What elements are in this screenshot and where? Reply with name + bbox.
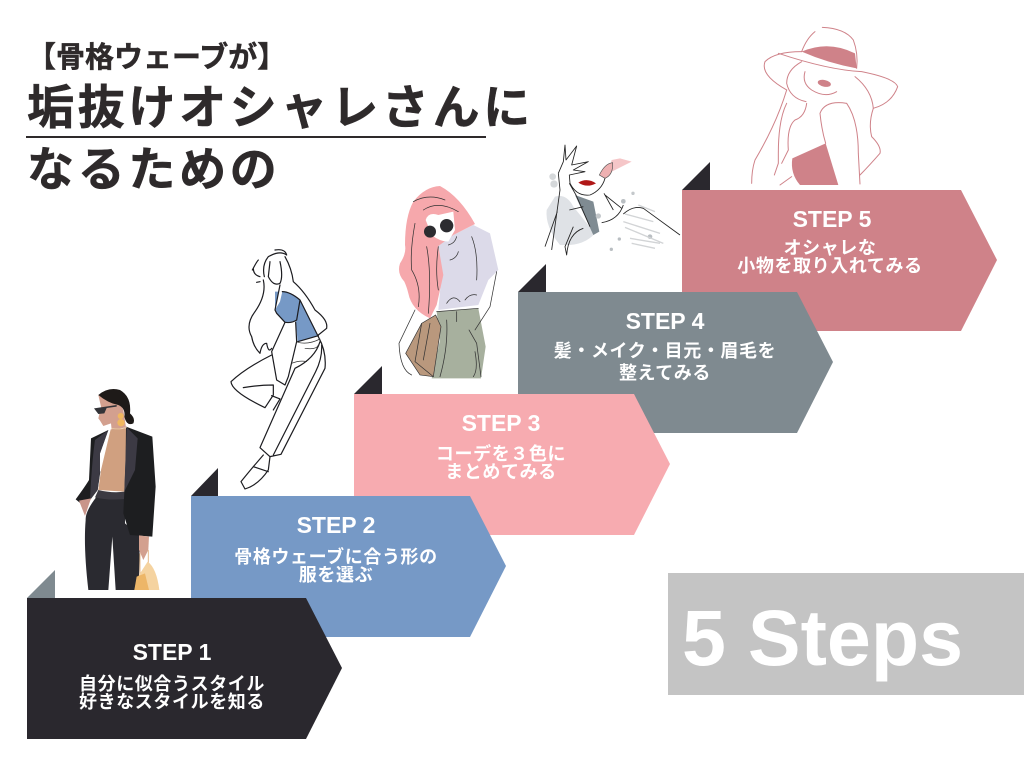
step 4 description: 整えてみる	[619, 363, 711, 383]
step 1 heading: STEP 1	[133, 639, 212, 665]
step 3 corner triangle	[354, 366, 382, 394]
step 5 description: オシャレな	[784, 238, 876, 258]
illustration: woman in black blazer	[76, 389, 159, 590]
step 3 arrow	[354, 394, 670, 535]
step 1 arrow	[27, 598, 342, 739]
step 4 panel	[518, 264, 833, 433]
step 4 heading: STEP 4	[626, 308, 705, 334]
step 2 description: 骨格ウェーブに合う形の	[234, 547, 438, 567]
step 3 description: コーデを３色に	[436, 444, 566, 464]
illustration: line-art woman in pink hat	[752, 27, 898, 185]
step 1 description: 自分に似合うスタイル	[79, 674, 265, 694]
title line 3: なるための	[27, 143, 280, 196]
step 2 arrow	[191, 496, 506, 637]
step 4 corner triangle	[518, 264, 546, 292]
step 1 description: 好きなスタイルを知る	[79, 692, 265, 712]
step 1 panel	[27, 570, 342, 739]
title block	[26, 40, 534, 196]
step 2 description: 服を選ぶ	[299, 565, 373, 585]
step 2 panel	[191, 468, 506, 637]
title line 2: 垢抜けオシャレさんに	[27, 81, 534, 134]
step 4 description: 髪・メイク・目元・眉毛を	[554, 341, 776, 361]
step 4 arrow	[518, 292, 833, 433]
illustration: line-art face with watercolor	[545, 145, 680, 255]
step 1 corner triangle	[27, 570, 55, 598]
step 3 description: まとめてみる	[445, 462, 557, 482]
step 3 heading: STEP 3	[462, 410, 540, 436]
title line 1: 【骨格ウェーブが】	[27, 40, 286, 74]
label text: 5 Steps	[682, 593, 963, 682]
illustration: pink-haired woman with sunglasses	[399, 186, 498, 378]
title underline	[26, 136, 486, 138]
step 5 heading: STEP 5	[793, 206, 872, 232]
step 2 heading: STEP 2	[297, 512, 375, 538]
label background	[668, 573, 1024, 695]
step 5 panel	[682, 162, 997, 331]
step 5 description: 小物を取り入れてみる	[737, 256, 923, 276]
illustration: line-art woman in blue top	[231, 250, 327, 489]
step 5 arrow	[682, 190, 997, 331]
step 2 corner triangle	[191, 468, 218, 496]
5 Steps label	[668, 573, 1024, 695]
step 3 panel	[354, 366, 670, 535]
step 5 corner triangle	[682, 162, 710, 190]
